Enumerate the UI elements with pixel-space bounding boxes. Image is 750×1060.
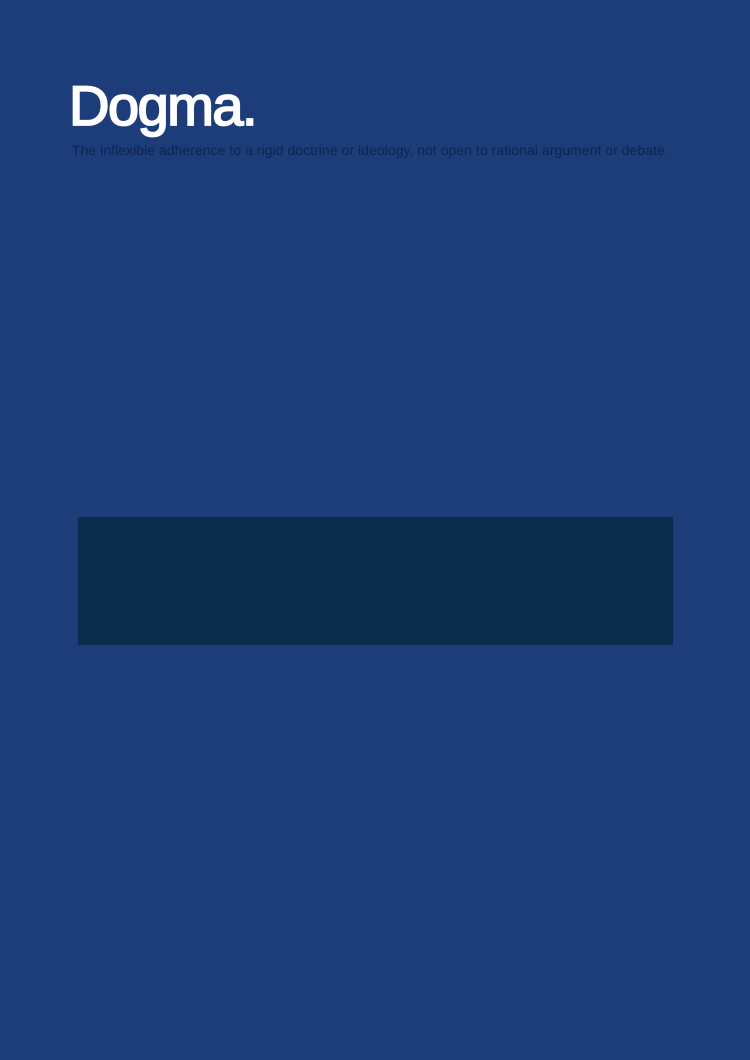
title: Dogma. [69,74,256,137]
dark horizontal rectangle [78,517,673,645]
definition text: The inflexible adherence to a rigid doctrine or ideology, not open to rational argument or debate. [72,142,669,158]
